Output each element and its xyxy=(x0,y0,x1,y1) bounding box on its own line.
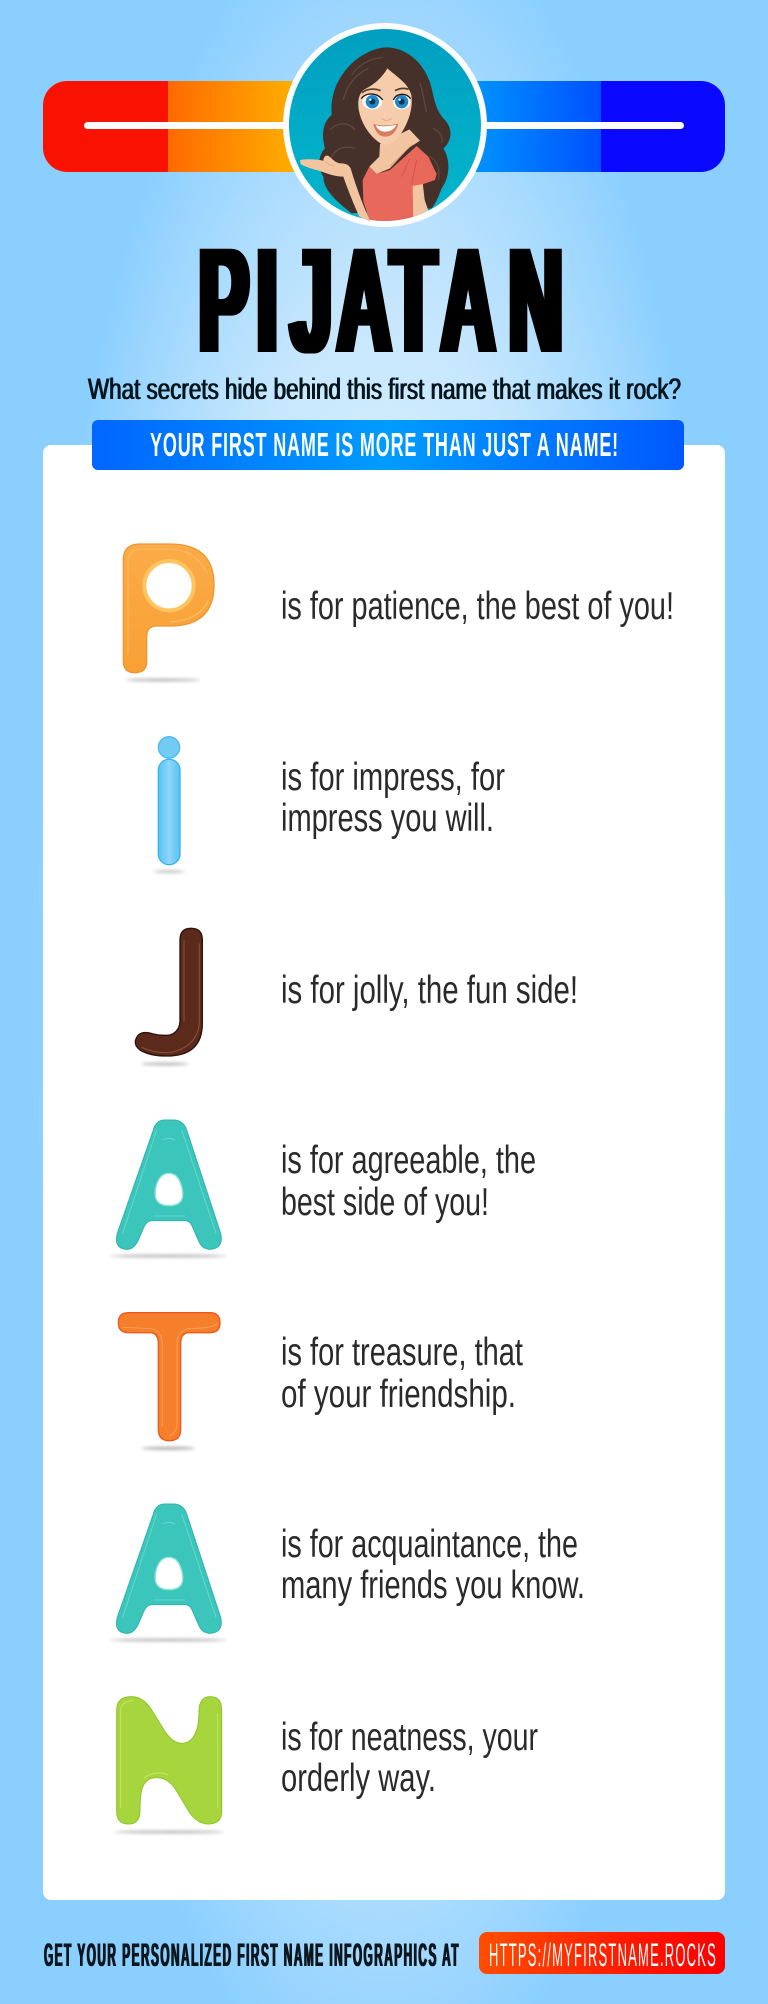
text: A second lines: many friends you know. xyxy=(281,1564,585,1607)
text: A second lines: is for acquaintance, the xyxy=(281,1523,578,1566)
row: I xyxy=(154,737,505,873)
raised hand and arm xyxy=(300,156,371,222)
text: J line: is for jolly, the fun side! xyxy=(281,969,578,1012)
text: A lines: is for agreeable, the xyxy=(281,1139,536,1182)
row: P xyxy=(123,544,674,681)
text: I lines xyxy=(281,756,505,840)
icon: jelly letter T xyxy=(118,1313,220,1450)
title: PIJATAN xyxy=(199,218,563,385)
mouth xyxy=(373,123,398,137)
header ribbon bar xyxy=(43,81,725,172)
text: N lines xyxy=(281,1716,538,1800)
icon: jelly letter i xyxy=(154,737,184,873)
eyebrows xyxy=(362,89,381,93)
nose xyxy=(382,118,392,120)
icon: jelly letter J xyxy=(135,928,202,1065)
icon: jelly letter P xyxy=(123,544,214,681)
text: N lines: orderly way. xyxy=(281,1757,436,1800)
icon: jelly letter A xyxy=(110,1120,227,1257)
row: N xyxy=(114,1697,538,1833)
text: I lines: impress you will. xyxy=(281,797,494,840)
panel: white content card xyxy=(43,445,725,1900)
eyes xyxy=(362,94,382,109)
text: T lines: is for treasure, that xyxy=(281,1331,523,1374)
shirt xyxy=(363,146,437,223)
portrait: cartoon woman in circle xyxy=(283,23,487,227)
row: A second xyxy=(110,1504,585,1641)
row: A xyxy=(110,1120,536,1257)
neck and chest xyxy=(369,129,420,174)
banner xyxy=(92,420,684,470)
row: T xyxy=(118,1313,523,1450)
text: A lines xyxy=(281,1139,536,1224)
text: T lines xyxy=(281,1331,523,1416)
text: I lines: is for impress, for xyxy=(281,756,505,799)
text: A lines: best side of you! xyxy=(281,1181,489,1224)
row: J xyxy=(135,928,578,1065)
text: N lines: is for neatness, your xyxy=(281,1716,538,1759)
right arm xyxy=(412,184,428,218)
icon: jelly letter N xyxy=(114,1697,224,1833)
face xyxy=(358,68,412,145)
icon: jelly letter A xyxy=(110,1504,227,1641)
text: T lines: of your friendship. xyxy=(281,1373,516,1416)
text: A second lines xyxy=(281,1523,585,1607)
